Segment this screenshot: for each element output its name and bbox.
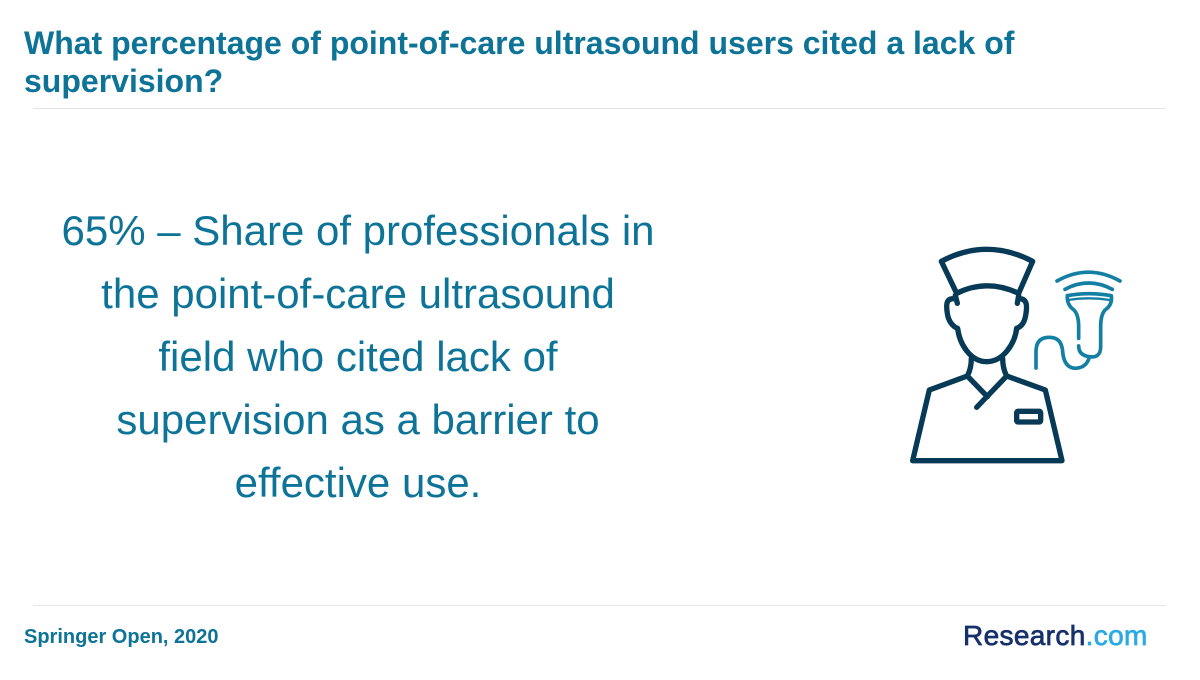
main statement text: 65% – Share of professionals in — [61, 207, 655, 254]
main statement text: effective use. — [235, 459, 481, 506]
icon: sonographer with ultrasound probe — [910, 246, 1122, 464]
main statement text — [61, 207, 655, 506]
bottom divider — [33, 605, 1166, 606]
person — [913, 249, 1062, 461]
title: What percentage of point-of-care ultrasound users cited a lack of — [24, 25, 1014, 61]
main statement text: field who cited lack of — [158, 333, 558, 380]
main statement text: the point-of-care ultrasound — [101, 270, 615, 317]
title: supervision? — [24, 63, 223, 99]
top divider — [33, 108, 1166, 109]
ultrasound probe — [1036, 272, 1120, 368]
source: Springer Open, 2020 — [24, 626, 219, 648]
title — [24, 25, 1014, 99]
main statement text: supervision as a barrier to — [116, 396, 600, 443]
logo: Research.com: Research.com — [963, 620, 1148, 651]
